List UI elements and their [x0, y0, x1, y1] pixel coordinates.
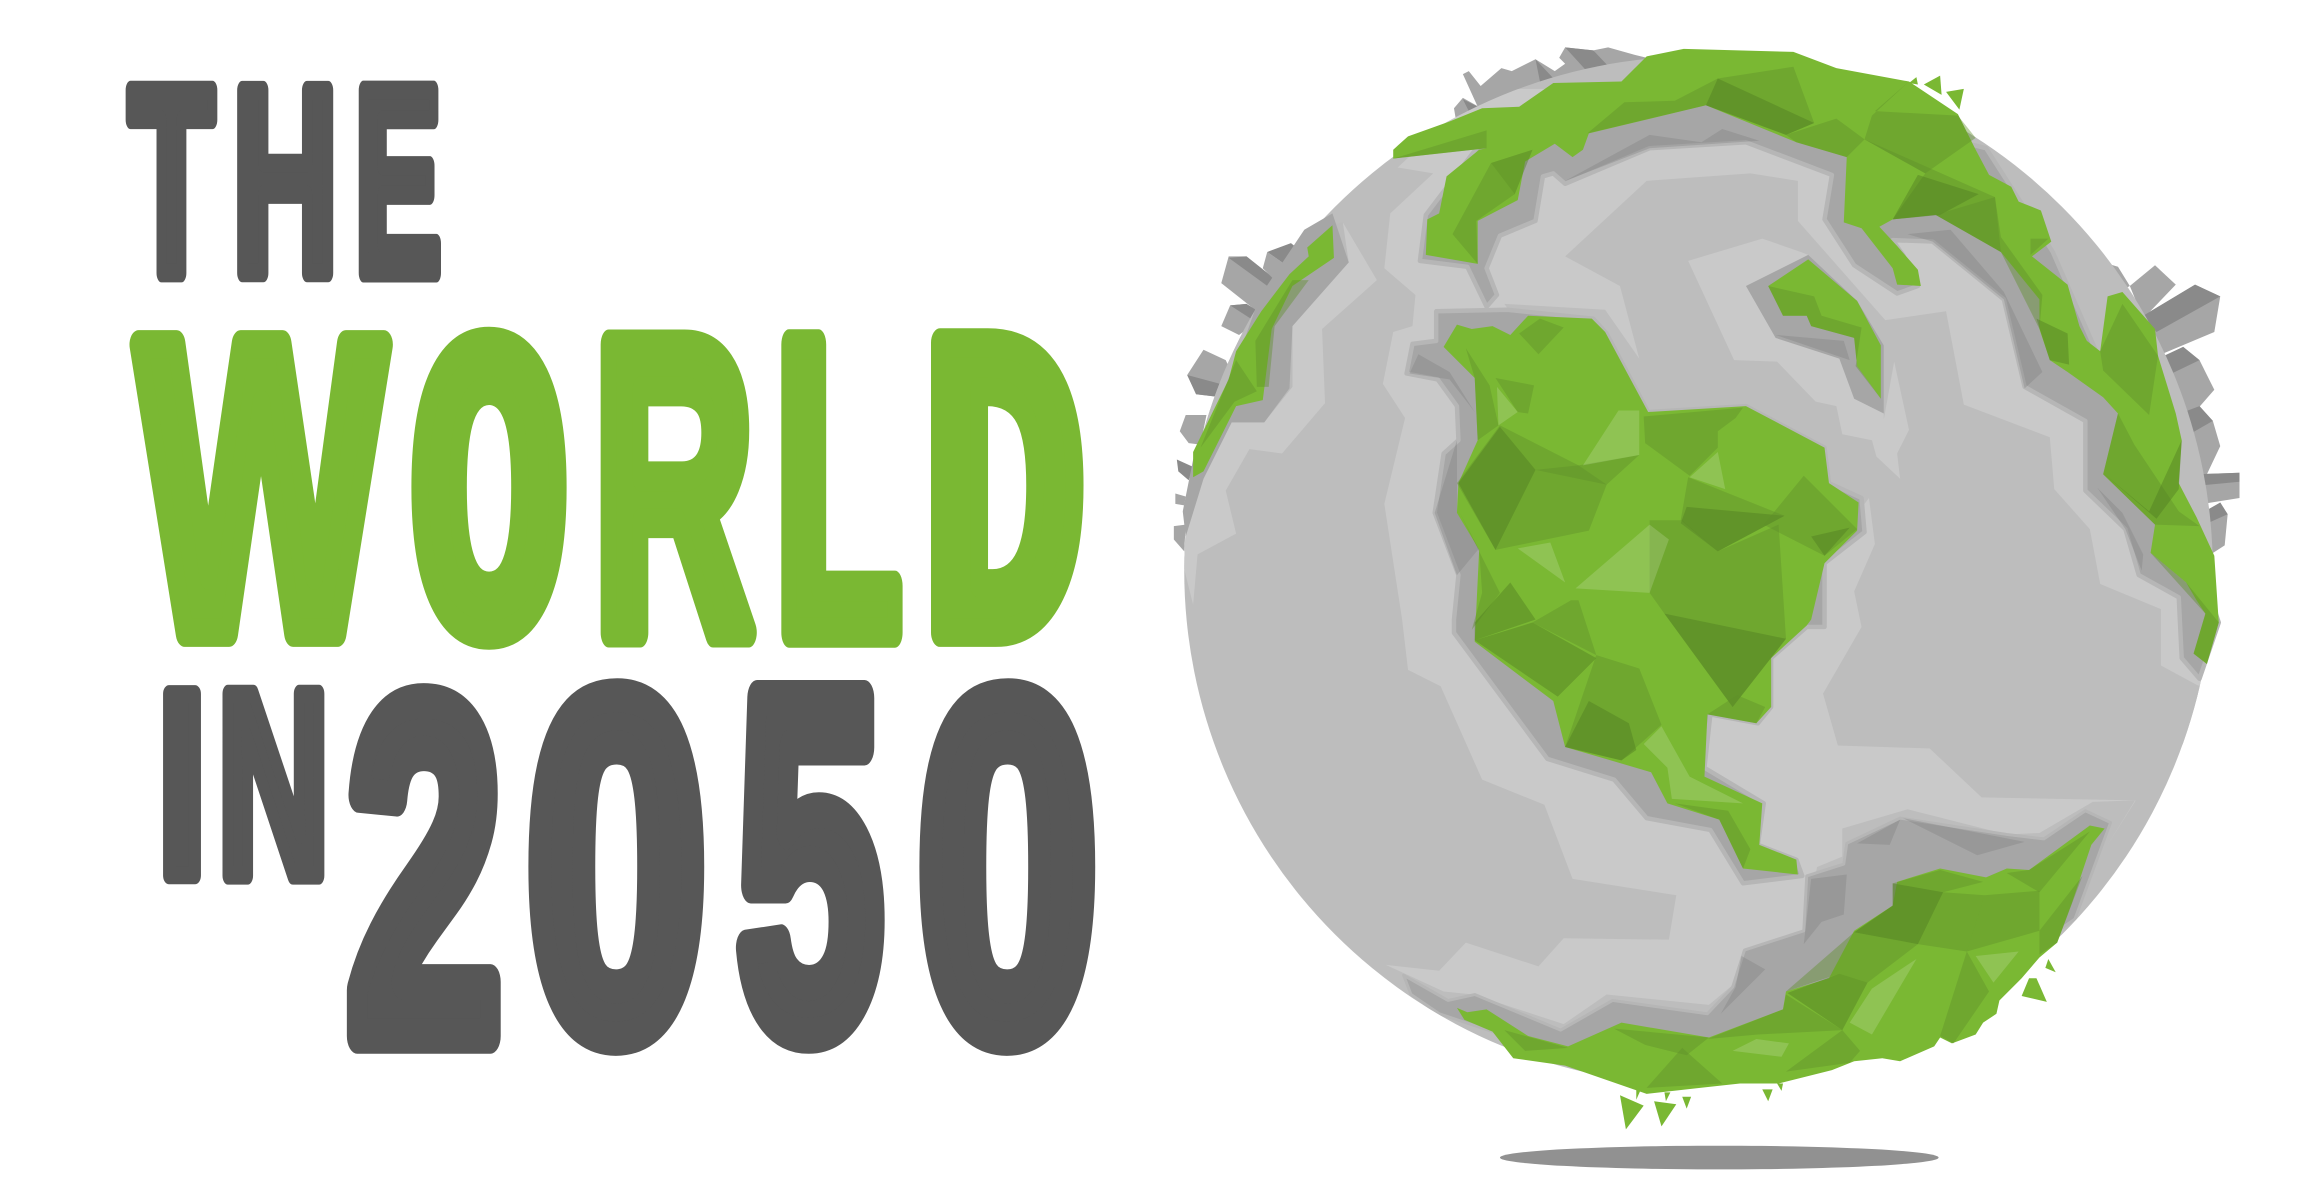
green land: northern arc: [1393, 49, 2219, 664]
green land: west coastal strip: [1193, 225, 1334, 477]
grey shadow band: west coast: [1171, 213, 1349, 537]
green island: [1768, 259, 1881, 399]
island shadow: [1746, 255, 1884, 414]
grey shadow band: central continent: [1407, 310, 1865, 883]
heading line: IN: N: [218, 636, 329, 932]
heading line: 2050: 0: [527, 596, 706, 1138]
heading line: WORLD: R: [594, 254, 753, 721]
falling green shards: [1620, 76, 2056, 1129]
heading line: WORLD: O: [411, 272, 567, 762]
light ring around island: [1688, 239, 1909, 479]
heading line: WORLD: L: [775, 253, 901, 721]
title: [129, 32, 1097, 1139]
central ocean pool: [1504, 173, 2223, 800]
heading line: THE: H: [232, 34, 338, 330]
green land: central continent: [1444, 316, 1859, 874]
heading line: THE: [129, 32, 441, 330]
heading line: IN: I: [157, 636, 207, 932]
heading line: 2050: 0: [918, 596, 1097, 1138]
heading line: WORLD: [138, 253, 1085, 765]
heading line: IN: [157, 636, 329, 932]
grey shadow band: south: [1404, 811, 2111, 1067]
heading line: WORLD: W: [138, 253, 387, 721]
sphere base: [1184, 56, 2213, 1085]
green land: southern continent: [1457, 826, 2105, 1094]
heading line: 2050: 5: [738, 594, 882, 1134]
heading line: 2050: 2: [348, 602, 502, 1139]
heading line: THE: T: [129, 32, 214, 329]
grey shadow band: north and east: [1420, 89, 2219, 679]
light shelf around continents: [1183, 89, 2208, 1024]
heading line: THE: E: [355, 34, 441, 330]
ground shadow: [1500, 1146, 1939, 1169]
low-poly globe illustration: [1171, 47, 2240, 1169]
heading line: 2050: [348, 594, 1097, 1139]
heading line: WORLD: D: [922, 266, 1085, 765]
grey spikes behind the globe: [1174, 47, 2240, 559]
